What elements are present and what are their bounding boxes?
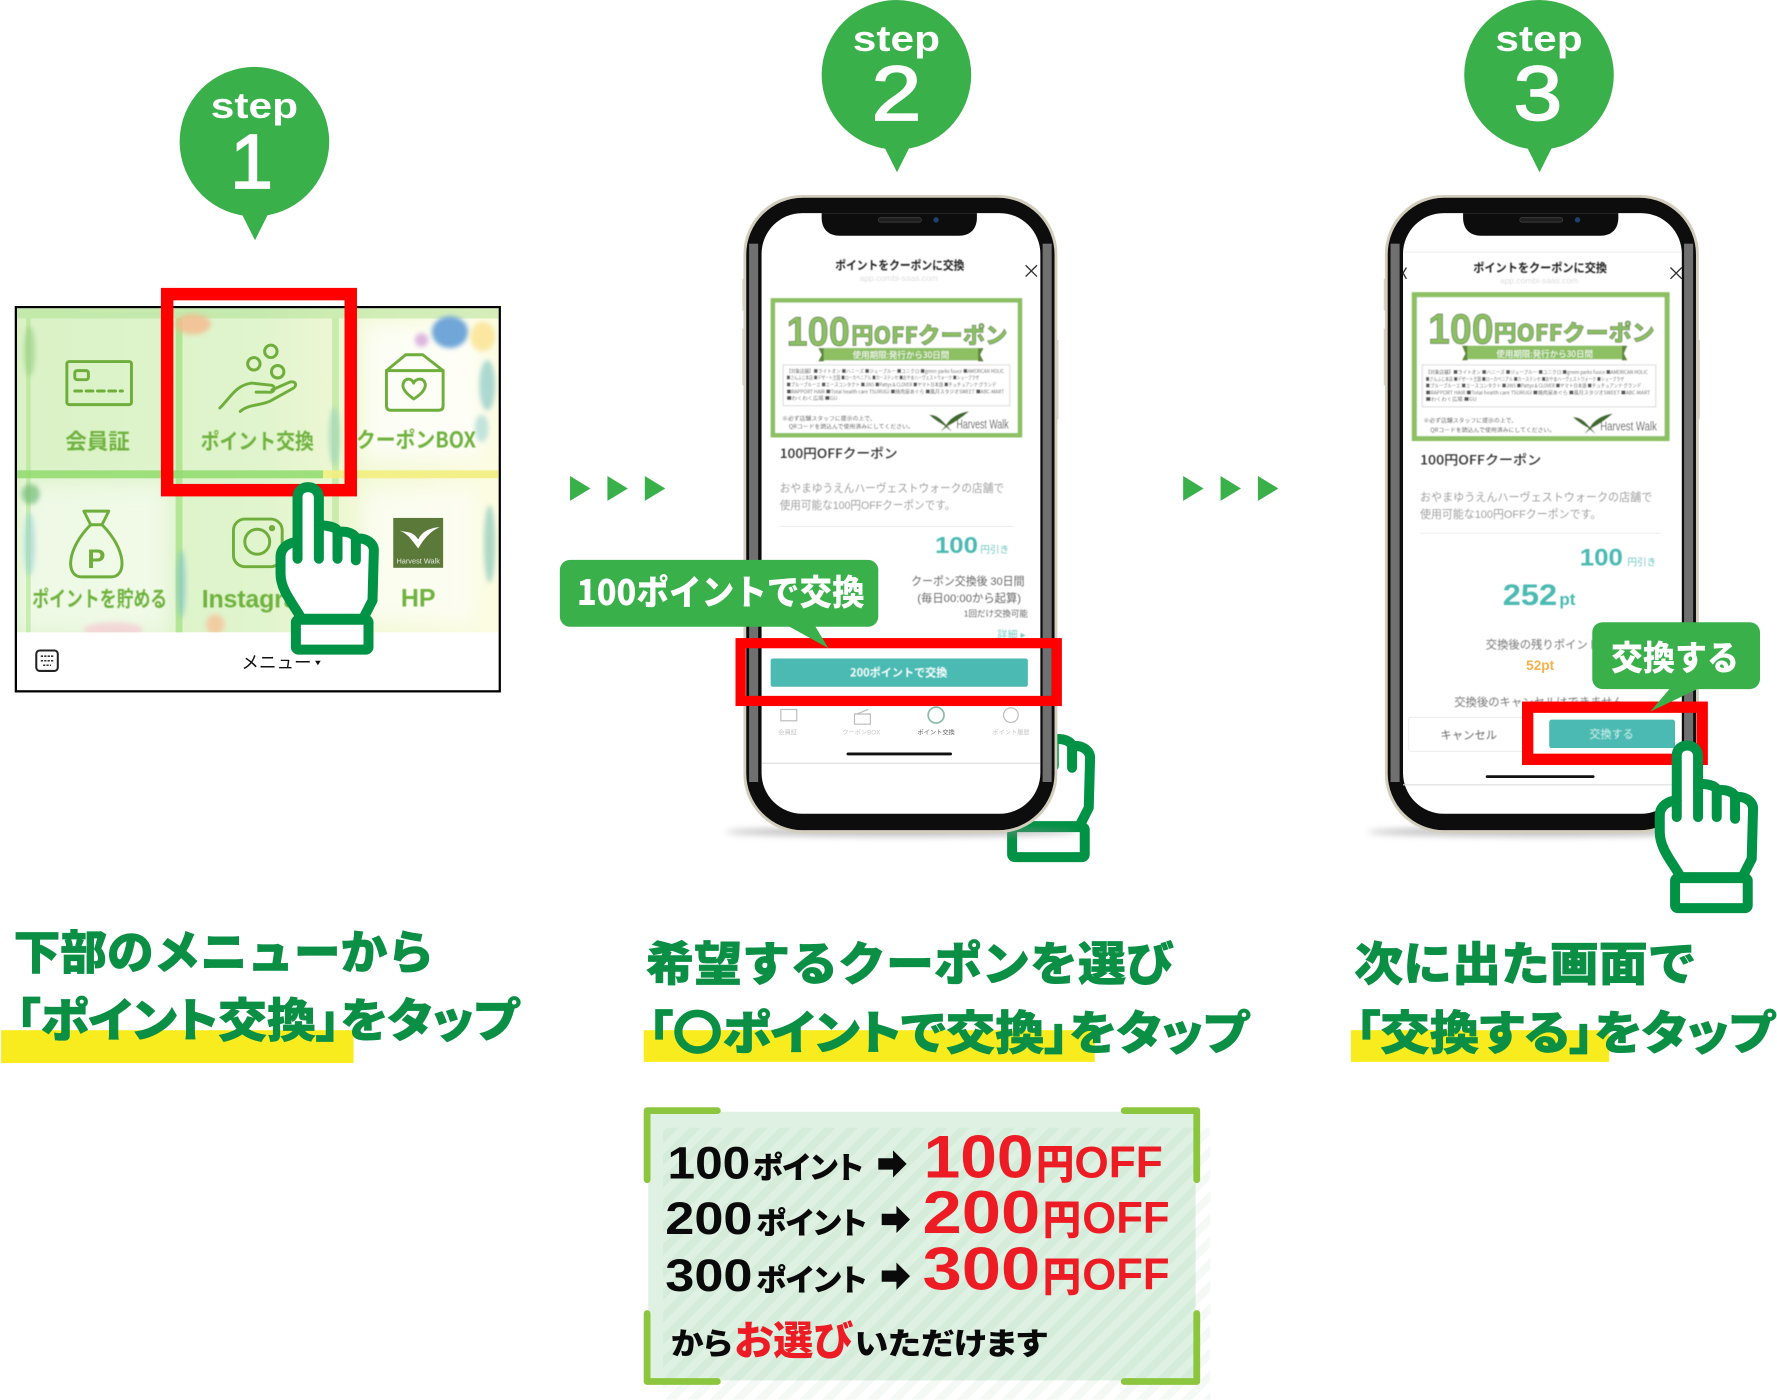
icon: Harvest Walk logo <box>393 518 443 568</box>
heading: step 1 instruction: 「ポイント交換」をタップ <box>16 984 521 1051</box>
icon: point bag <box>71 511 122 577</box>
button: cancel <box>1409 717 1531 751</box>
coupon image: ■RAPPORT HAIR ■Total health care TSURUGI ■焼肉屋あぐら ■風月スタジオSWEET ■ABC-MART <box>1426 389 1650 396</box>
icon: menu caret <box>315 661 321 665</box>
step 1 badge: step <box>211 85 298 126</box>
label: 会員証: 会員証 <box>65 425 130 456</box>
coupon image: 使用期限:発行から30日間 <box>853 349 949 361</box>
coupon image: 【対象店舗】■ライトオン ■ハニーズ ■ジューブルー ■ユニクロ ■green parks fuuce ■AMERICAN HOLIC <box>787 368 1004 375</box>
phone text: discount amount: 100 <box>935 532 978 558</box>
phone text: discount amount <box>935 532 1009 558</box>
coupon image: ※必ず店舗スタッフに提示の上で、 <box>782 413 876 422</box>
coupon image: QRコードを読込んで使用済みにしてください。 <box>789 421 914 430</box>
rate row: 200: OFF <box>1082 1194 1170 1243</box>
step 2 badge: 2 <box>872 51 921 137</box>
button: cancel: キャンセル <box>1440 727 1497 743</box>
heading: step 2 instruction: 「〇ポイントで交換」をタップ <box>648 996 1251 1063</box>
phone text: URL: app.combi-saas.com <box>1500 275 1578 285</box>
panel: LINE rich menu screenshot <box>16 307 500 691</box>
closing sentence: お選び <box>734 1319 854 1363</box>
callout: 100ポイントで交換 <box>560 560 878 648</box>
closing sentence <box>671 1319 1047 1363</box>
rate row: 100: 100 <box>924 1124 1034 1191</box>
icon: keyboard <box>36 651 58 671</box>
rate row: 200 <box>665 1179 1170 1246</box>
step 2 badge <box>822 0 971 172</box>
phone text: coupon name: 100円OFFクーポン <box>1420 450 1541 469</box>
rate row: 100 <box>668 1124 1163 1191</box>
label: クーポンBOX: クーポンBOX <box>356 424 476 455</box>
phone text: modal title: ポイントをクーポンに交換 <box>1473 259 1607 276</box>
phone text: coupon name: 100円OFFクーポン <box>780 443 898 462</box>
highlight: red frame on exchange button <box>741 643 1057 701</box>
phone text: validity <box>911 574 1028 641</box>
rate row: 200: 200 <box>922 1179 1040 1246</box>
label: Instagram: Instagram <box>202 585 320 613</box>
rate row: 300: ポイント <box>756 1256 867 1300</box>
phone text: remaining points label: 交換後の残りポイント <box>1486 636 1599 652</box>
heading: step 1 instruction: 下部のメニューから <box>14 916 434 983</box>
coupon image: ■ブルーブルーエ ■エースコンタクト ■JINS ■Pattys & CLOVER ■ヤマト日本語 ■チュチュアンナ グランデ <box>787 381 996 388</box>
panel: point to coupon rates <box>647 1111 1210 1400</box>
heading: step 3 instruction: 「交換する」をタップ <box>1355 996 1777 1063</box>
phone: step 3 screen <box>1368 195 1719 836</box>
coupon image <box>773 300 1020 435</box>
label: ポイントを貯める: ポイントを貯める <box>32 582 167 613</box>
phone text: modal title: ポイントをクーポンに交換 <box>835 257 965 274</box>
icon: pointing hand step 1 <box>281 487 374 650</box>
rate row: 200: 200 <box>665 1193 753 1244</box>
callout: 交換する: 交換する <box>1611 631 1739 680</box>
closing sentence: から <box>671 1327 732 1361</box>
coupon image: 【対象店舗】■ライトオン ■ハニーズ ■ジューブルー ■ユニクロ ■green parks fuuce ■AMERICAN HOLIC <box>1426 369 1648 376</box>
coupon image: ■RAPPORT HAIR ■Total health care TSURUGI ■焼肉屋あぐら ■風月スタジオSWEET ■ABC-MART <box>787 388 1004 395</box>
tab bar: クーポンBOX <box>842 728 881 736</box>
phone text: description <box>780 481 1004 512</box>
coupon image: ■さんふじ本店 ■デザート王国 ■ローカベニアル ■カーステンセ ■おやまハーヴェストウォーク ■シューブラザ <box>787 375 979 382</box>
callout: 100ポイントで交換: 100ポイントで交換 <box>577 565 865 616</box>
highlight: red frame on ポイント交換 <box>167 294 351 490</box>
label: ポイント交換: ポイント交換 <box>201 425 314 456</box>
rate row: 300: OFF <box>1082 1251 1170 1300</box>
heading: step 2 instruction <box>644 927 1251 1063</box>
rate row: 300 <box>665 1236 1170 1303</box>
phone text: validity: (毎日00:00から起算) <box>917 591 1021 605</box>
button: exchange <box>1549 720 1675 748</box>
icon: coupon box <box>386 355 443 410</box>
coupon image: Harvest Walk <box>1600 420 1657 434</box>
coupon image: ■わくわく広場 ■GU <box>1426 396 1477 403</box>
rate row: 100: 円 <box>1036 1132 1074 1191</box>
phone text: description: 使用可能な100円OFFクーポンです。 <box>1420 507 1601 521</box>
heading: step 3 instruction <box>1351 927 1777 1063</box>
coupon image: ■さんふじ本店 ■デザート王国 ■ローカベニアル ■カーステンセ ■おやまハーヴェストウォーク ■シューブラザ <box>1426 376 1624 383</box>
button: 200 points: 200ポイントで交換 <box>850 665 947 681</box>
step 2 badge: step <box>853 18 940 59</box>
coupon image <box>1414 295 1667 439</box>
icon: coins over hand <box>220 345 296 411</box>
coupon image: 円OFFクーポン <box>851 317 1007 350</box>
step 3 badge: step <box>1495 18 1583 59</box>
rate row: 100: ポイント <box>753 1144 864 1188</box>
rate row: 100: OFF <box>1074 1139 1163 1188</box>
coupon image: 100 <box>787 309 850 355</box>
corner brackets <box>647 1111 1197 1382</box>
tab bar: 会員証 <box>778 728 797 736</box>
phone text: discount amount: 円引き <box>1627 555 1656 569</box>
phone text: validity: 1回だけ交換可能 <box>964 609 1028 619</box>
coupon image: ※必ず店舗スタッフに提示の上で、 <box>1423 416 1517 425</box>
rate row: 300: 円 <box>1043 1244 1081 1303</box>
rate row: 200: 円 <box>1043 1187 1081 1246</box>
heading: step 3 instruction: 次に出た画面で <box>1354 927 1697 994</box>
rate row: 300: 300 <box>922 1236 1040 1303</box>
coupon image: ■わくわく広場 ■GU <box>787 395 838 402</box>
coupon image: Harvest Walk <box>956 417 1009 431</box>
icon: instagram <box>233 519 282 567</box>
callout: 交換する <box>1592 622 1760 712</box>
step 1 badge <box>180 67 329 240</box>
coupon image: 100 <box>1428 305 1494 353</box>
phone text: points held: pt <box>1559 590 1576 609</box>
phone text: discount amount <box>1580 545 1656 572</box>
icon: member card <box>67 362 131 405</box>
icon: pointing hand step 3 <box>1660 745 1753 908</box>
phone text: description: おやまゆうえんハーヴェストウォークの店舗で <box>1420 490 1652 504</box>
phone text: validity: 詳細 ▸ <box>997 628 1026 641</box>
phone text: discount amount: 円引き <box>980 542 1009 556</box>
highlight: red frame on 交換する <box>1528 707 1702 759</box>
button: 200 points <box>771 658 1028 687</box>
coupon image: 円OFFクーポン <box>1494 315 1655 348</box>
coupon image: 使用期限:発行から30日間 <box>1496 348 1593 360</box>
phone text: cancellation note: 交換後のキャンセルはできません <box>1454 694 1624 710</box>
closing sentence: いただけます <box>855 1327 1047 1361</box>
icon: Harvest Walk logo: Harvest Walk <box>396 556 440 565</box>
heading: step 2 instruction: 希望するクーポンを選び <box>646 927 1174 994</box>
rate row: 200: ポイント <box>756 1199 867 1243</box>
icon: close and back <box>1403 267 1682 279</box>
rate row: 100: 100 <box>668 1138 750 1189</box>
arrows: step 2 to 3 <box>1183 476 1278 501</box>
arrows: step 1 to 2 <box>570 476 665 501</box>
phone text: description <box>1420 490 1652 521</box>
phone text: remaining points: 52pt <box>1526 658 1555 673</box>
phone text: description: おやまゆうえんハーヴェストウォークの店舗で <box>780 481 1004 495</box>
button: exchange: 交換する <box>1589 726 1634 742</box>
step 3 badge <box>1464 0 1614 172</box>
label: bag letter: P <box>87 543 105 574</box>
coupon image: ■ブルーブルーエ ■エースコンタクト ■JINS ■Pattys & CLOVER ■ヤマト日本語 ■チュチュアンナ グランデ <box>1426 383 1641 390</box>
coupon image: QRコードを読込んで使用済みにしてください。 <box>1430 425 1555 434</box>
label: HP: HP <box>401 584 435 612</box>
tab bar <box>778 707 1030 736</box>
icon: close <box>1026 265 1037 277</box>
phone text: points held <box>1503 579 1576 612</box>
rate row: 300: 300 <box>665 1250 753 1301</box>
phone text: discount amount: 100 <box>1580 545 1623 572</box>
phone text: description: 使用可能な100円OFFクーポンです。 <box>780 498 955 512</box>
step 3 badge: 3 <box>1514 51 1562 137</box>
phone text: points held: 252 <box>1503 579 1557 612</box>
icon: pointing hand step 2 <box>997 694 1090 857</box>
heading: step 1 instruction <box>1 916 521 1063</box>
phone: step 2 screen <box>725 195 1077 836</box>
tab bar: ポイント交換 <box>917 728 955 736</box>
phone text: URL: app.combi-saas.com <box>860 273 938 283</box>
step 1 badge: 1 <box>230 119 273 205</box>
label: メニュー: メニュー <box>241 650 312 675</box>
phone text: validity: クーポン交換後 30日間 <box>911 574 1024 588</box>
tab bar: ポイント履歴 <box>992 728 1030 736</box>
